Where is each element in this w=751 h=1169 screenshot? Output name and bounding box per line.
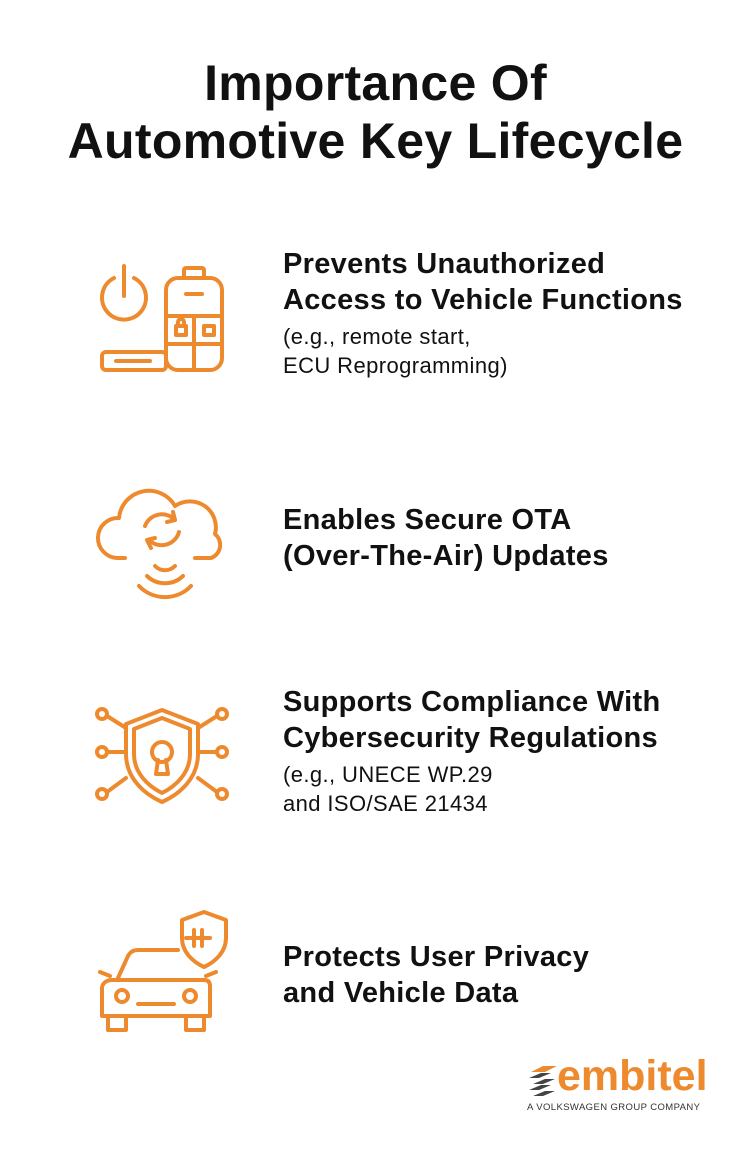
block 2: Enables Secure OTA xyxy=(283,504,572,536)
icon: cloud xyxy=(96,488,222,600)
block 4 xyxy=(283,941,589,1009)
title: Automotive Key Lifecycle xyxy=(68,113,683,169)
logo xyxy=(527,1052,708,1113)
logo: A VOLKSWAGEN GROUP COMPANY xyxy=(527,1102,700,1113)
block 4: and Vehicle Data xyxy=(283,977,518,1009)
icon: key fob xyxy=(100,264,224,372)
icon: car with shield xyxy=(98,910,228,1032)
title: Importance Of xyxy=(204,55,547,111)
block 2: (Over-The-Air) Updates xyxy=(283,540,609,572)
block 3: Cybersecurity Regulations xyxy=(283,722,658,754)
block 3: and ISO/SAE 21434 xyxy=(283,791,488,816)
block 1: (e.g., remote start, xyxy=(283,324,471,349)
logo: embitel xyxy=(557,1052,708,1100)
block 2 xyxy=(283,504,609,572)
block 3: (e.g., UNECE WP.29 xyxy=(283,762,493,787)
block 1: Access to Vehicle Functions xyxy=(283,284,683,316)
block 3: Supports Compliance With xyxy=(283,686,661,718)
block 4: Protects User Privacy xyxy=(283,941,589,973)
block 1: Prevents Unauthorized xyxy=(283,248,605,280)
block 3 xyxy=(283,686,661,816)
title xyxy=(68,55,683,169)
block 1 xyxy=(283,248,683,378)
icon: shield xyxy=(95,707,229,804)
block 1: ECU Reprogramming) xyxy=(283,353,508,378)
